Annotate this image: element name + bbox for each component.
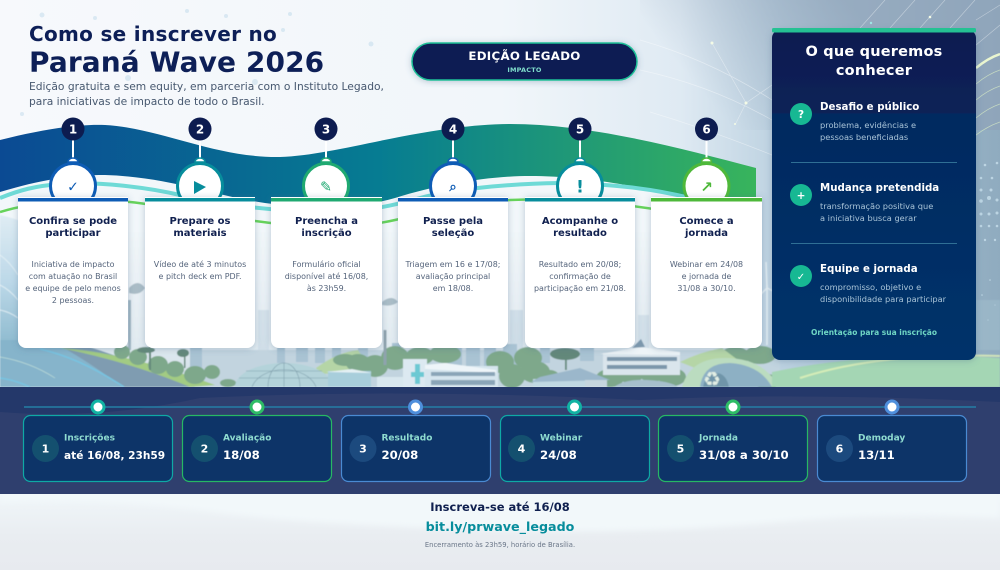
step 5 [525, 118, 635, 348]
card: preencha a inscrição: inscrição [301, 228, 352, 239]
item: mudança pretendida: transformação positiva que [820, 201, 933, 211]
date card: webinar: 24/08 [540, 448, 577, 462]
skyline [190, 343, 594, 370]
date card: avaliação: 2 [201, 442, 208, 456]
number badge 2 [188, 118, 212, 159]
title: Como se inscrever no [29, 22, 277, 46]
hospital [403, 359, 427, 387]
date card: webinar [500, 416, 650, 482]
recycling dome [682, 358, 776, 387]
card: comece a jornada: e jornada de [682, 272, 732, 281]
deadline note: Encerramento às 23h59, horário de Brasília. [425, 541, 575, 549]
item: desafio e público: problema, evidências e [820, 120, 916, 130]
card: passe pela seleção: Passe pela [423, 216, 483, 227]
call to action: Inscreva-se até 16/08 [430, 500, 570, 514]
timeline band [0, 387, 1000, 494]
card: passe pela seleção: seleção [432, 228, 474, 239]
flowing wave ribbon [0, 124, 756, 300]
date card: demoday: 6 [836, 442, 844, 456]
date card: resultado: 3 [359, 442, 367, 456]
date card: inscrições [24, 416, 172, 482]
card: confira se pode participar: Confira se pode [29, 216, 117, 227]
card: preencha a inscrição: disponível até 16/08, [285, 271, 368, 281]
icon: arrow: ↗ [700, 178, 713, 196]
icon: exclamation [558, 158, 602, 208]
date card: jornada: 31/08 a 30/10 [699, 448, 789, 462]
subtitle: Edição gratuita e sem equity, em parceria com o Instituto Legado, [29, 80, 384, 93]
date card: webinar: 4 [518, 442, 526, 456]
icon: search [430, 158, 476, 208]
item: mudança pretendida: + [797, 190, 805, 202]
footer [0, 490, 1000, 570]
panel heading [806, 44, 942, 79]
date card: inscrições: 1 [42, 442, 49, 456]
date card: inscrições: até 16/08, 23h59 [64, 450, 165, 462]
date card: demoday: Demoday [858, 434, 905, 444]
card: comece a jornada: Webinar em 24/08 [670, 260, 743, 269]
tree clusters [114, 345, 236, 387]
card: prepare os materiais: e pitch deck em PDF. [159, 272, 241, 281]
icon: check: ✓ [67, 180, 79, 196]
date card: demoday [818, 416, 966, 482]
date card: jornada: 5 [677, 442, 684, 456]
date card: inscrições: Inscrições [64, 434, 115, 444]
panel heading: O que queremos [806, 44, 942, 60]
item: equipe e jornada [790, 263, 947, 304]
panel: o que queremos conhecer [772, 28, 976, 360]
illustrated city scene [0, 215, 1000, 391]
card: prepare os materiais: materiais [173, 228, 227, 239]
item: equipe e jornada: ✓ [797, 272, 805, 283]
wind turbine [759, 262, 775, 345]
number badge 5 [568, 118, 592, 159]
number badge 1 [62, 118, 84, 159]
card: prepare os materiais: Vídeo de até 3 minutos [154, 259, 246, 269]
edition badge: EDIÇÃO LEGADO [468, 48, 581, 63]
number badge 5: 5 [576, 122, 584, 136]
icon: play [178, 158, 222, 208]
card: comece a jornada: jornada [684, 228, 728, 239]
card: acompanhe o resultado: confirmação de [549, 272, 611, 281]
card: passe pela seleção [398, 197, 508, 348]
card: preencha a inscrição: Preencha a [295, 216, 358, 227]
item: equipe e jornada: compromisso, objetivo e [820, 282, 921, 292]
icon: search: ⌕ [448, 180, 457, 195]
card: passe pela seleção: Triagem em 16 e 17/08; [405, 260, 500, 269]
link: bit.ly/prwave_legado [426, 519, 575, 535]
date card: resultado [342, 416, 490, 482]
step 4 [398, 118, 508, 348]
date card: jornada [658, 416, 808, 482]
card: confira se pode participar: 2 pessoas. [52, 296, 94, 305]
step 2 [145, 118, 255, 348]
subtitle: para iniciativas de impacto de todo o Brasil. [29, 95, 265, 108]
marker 1 [92, 401, 104, 413]
number badge 3: 3 [322, 122, 330, 136]
number badge 1: 1 [69, 122, 77, 136]
item: mudança pretendida [790, 182, 939, 223]
card: comece a jornada: Comece a [679, 216, 734, 227]
item: desafio e público [790, 101, 919, 142]
number badge 6 [695, 118, 718, 159]
edition badge [412, 43, 637, 80]
date card: resultado: 20/08 [382, 448, 418, 462]
card: confira se pode participar: Iniciativa de impacto [31, 260, 115, 269]
card: confira se pode participar: com atuação no Brasil [29, 272, 117, 281]
number badge 6: 6 [702, 122, 711, 136]
card: acompanhe o resultado: participação em 21/08. [534, 284, 626, 293]
marker 2 [251, 401, 263, 413]
card: comece a jornada: 31/08 a 30/10. [677, 284, 736, 293]
glass dome [235, 363, 333, 387]
background [0, 0, 1000, 387]
edition badge: IMPACTO [507, 66, 542, 74]
icon: check [50, 158, 96, 208]
card: acompanhe o resultado: Acompanhe o [542, 216, 618, 227]
icon: arrow [684, 158, 729, 208]
card: confira se pode participar: participar [45, 228, 101, 239]
panel heading: conhecer [836, 63, 913, 79]
item: equipe e jornada: Equipe e jornada [820, 263, 918, 275]
step 3 [271, 118, 382, 348]
item: equipe e jornada: disponibilidade para participar [820, 294, 947, 304]
marker 6 [886, 401, 898, 413]
number badge 3 [314, 118, 338, 159]
card: acompanhe o resultado: Resultado em 20/08; [539, 260, 621, 269]
date card: avaliação: Avaliação [223, 434, 271, 444]
icon: exclamation: ! [576, 178, 584, 198]
date card: avaliação: 18/08 [223, 448, 260, 462]
step 1 [18, 118, 128, 348]
card: preencha a inscrição: às 23h59. [307, 284, 346, 293]
date card: demoday: 13/11 [858, 448, 895, 462]
hill left [0, 340, 195, 387]
number badge 4: 4 [449, 122, 457, 136]
card: acompanhe o resultado [525, 197, 635, 348]
back ground fill [190, 350, 780, 387]
number badge 2: 2 [196, 122, 204, 136]
date card: resultado: Resultado [382, 434, 432, 444]
icon: pencil: ✎ [320, 180, 332, 196]
card: prepare os materiais [145, 197, 255, 348]
card: prepare os materiais: Prepare os [170, 216, 231, 227]
card: acompanhe o resultado: resultado [553, 228, 607, 239]
panel note: Orientação para sua inscrição [811, 328, 937, 337]
title: Paraná Wave 2026 [29, 46, 324, 78]
solar building [533, 379, 588, 387]
step 6 [651, 118, 762, 348]
marker 4 [568, 401, 580, 413]
marker 3 [410, 401, 422, 413]
card: passe pela seleção: avaliação principal [416, 272, 490, 281]
card: confira se pode participar: e equipe de pelo menos [25, 284, 121, 293]
item: desafio e público: pessoas beneficiadas [820, 132, 908, 142]
card: preencha a inscrição: Formulário oficial [292, 260, 361, 269]
card: comece a jornada [651, 197, 762, 348]
date card: jornada: Jornada [698, 434, 738, 444]
number badge 4 [442, 118, 464, 159]
illustrated city scene: ♻ [703, 367, 721, 391]
large building [603, 353, 680, 375]
card: passe pela seleção: em 18/08. [433, 284, 473, 293]
marker 5 [727, 401, 739, 413]
icon: pencil [304, 158, 348, 208]
card: confira se pode participar [18, 197, 128, 348]
item: desafio e público: ? [798, 109, 804, 121]
subtitle [29, 80, 384, 108]
date card: webinar: Webinar [540, 434, 583, 444]
item: mudança pretendida: Mudança pretendida [820, 182, 939, 194]
item: mudança pretendida: a iniciativa busca gerar [820, 213, 917, 223]
title [29, 22, 324, 78]
item: desafio e público: Desafio e público [820, 101, 919, 113]
date card: avaliação [182, 416, 332, 482]
low building [328, 371, 371, 387]
card: preencha a inscrição [271, 197, 382, 348]
